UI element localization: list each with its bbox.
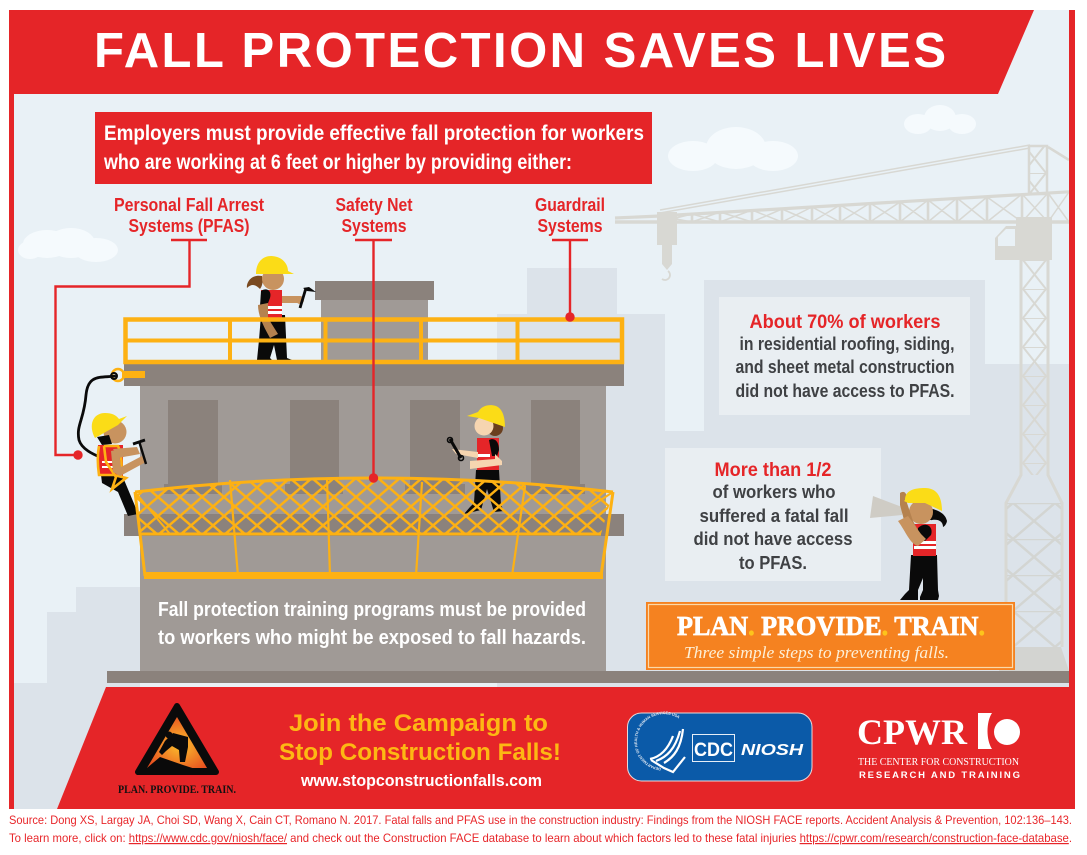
label: personal fall arrest systems xyxy=(114,194,264,236)
employer requirement box: Employers must provide effective fall protection for workers xyxy=(104,122,644,145)
label: personal fall arrest systems: Personal Fall Arrest xyxy=(114,194,264,215)
background city skyline xyxy=(14,268,1070,809)
plan provide train banner: PLAN. PROVIDE. TRAIN. xyxy=(677,611,985,641)
worker on ledge with wrench xyxy=(448,405,505,514)
employer requirement box xyxy=(95,112,652,184)
campaign call to action: Stop Construction Falls! xyxy=(279,739,561,766)
label: guardrail systems: Guardrail xyxy=(535,194,605,215)
source citation and links: To learn more, click on: https://www.cdc.gov/niosh/face/ and check out the Construction FACE database to learn about which factors led to these fatal injuries https://cpwr.com/research/construction-face-database. xyxy=(9,831,1072,845)
campaign sign logo: PLAN. PROVIDE. TRAIN. xyxy=(118,784,236,796)
callout: more than half: to PFAS. xyxy=(739,553,807,573)
label: guardrail systems: Systems xyxy=(538,215,602,236)
callout: 70 percent: in residential roofing, siding, xyxy=(740,334,954,354)
CDC NIOSH logo panel: NIOSH xyxy=(741,742,804,759)
callout: more than half: did not have access xyxy=(694,529,852,549)
worker on roof with hammer xyxy=(247,256,316,360)
CPWR logo: THE CENTER FOR CONSTRUCTION xyxy=(858,757,1019,768)
ground strip xyxy=(107,671,1069,683)
pointer line: guardrail xyxy=(552,240,588,322)
label: personal fall arrest systems: Systems (PFAS) xyxy=(128,215,250,236)
callout: more than half: of workers who xyxy=(712,482,836,502)
callout: more than half xyxy=(665,448,881,581)
safety net xyxy=(130,475,620,579)
worker in fall arrest harness xyxy=(92,413,146,516)
callout: 70 percent xyxy=(719,297,970,415)
label: safety net systems: Safety Net xyxy=(336,194,412,215)
frame right edge xyxy=(1069,10,1075,809)
employer requirement box: who are working at 6 feet or higher by providing either: xyxy=(103,151,572,174)
training text xyxy=(158,599,586,649)
pointer line: safety net xyxy=(355,240,392,483)
campaign call to action: Join the Campaign to xyxy=(289,710,548,737)
CDC NIOSH logo panel: DEPARTMENT OF HEALTH & HUMAN SERVICES USA xyxy=(634,712,680,770)
bottom red band xyxy=(57,687,1075,809)
plan provide train banner: Three simple steps to preventing falls. xyxy=(684,643,949,662)
CPWR logo: CPWR xyxy=(857,712,968,752)
CDC NIOSH logo panel: CDC xyxy=(694,740,733,761)
campaign call to action: www.stopconstructionfalls.com xyxy=(300,772,542,790)
label: safety net systems xyxy=(336,194,412,236)
callout: 70 percent: did not have access to PFAS. xyxy=(736,381,954,401)
callout: more than half: suffered a fatal fall xyxy=(700,506,848,526)
campaign sign logo xyxy=(118,706,236,796)
CPWR logo xyxy=(857,712,1020,781)
label: guardrail systems xyxy=(535,194,605,236)
title: FALL PROTECTION SAVES LIVES xyxy=(94,24,946,78)
pointer line: personal fall arrest xyxy=(56,240,207,460)
crane cabin and trolley hook xyxy=(657,212,1069,671)
tower crane xyxy=(615,145,1069,647)
callout: more than half: More than 1/2 xyxy=(714,459,832,481)
training text: to workers who might be exposed to fall hazards. xyxy=(158,627,586,649)
label: safety net systems: Systems xyxy=(342,215,406,236)
CPWR logo: RESEARCH AND TRAINING xyxy=(859,770,1020,781)
callout: 70 percent: and sheet metal construction xyxy=(736,357,954,377)
source citation and links xyxy=(9,813,1072,845)
plan provide train banner xyxy=(646,602,1015,670)
training text: Fall protection training programs must be provided xyxy=(158,599,586,621)
callout: 70 percent: About 70% of workers xyxy=(750,311,941,333)
worker with megaphone xyxy=(870,488,947,600)
CDC NIOSH logo panel xyxy=(627,712,812,782)
building xyxy=(124,281,624,671)
campaign call to action xyxy=(279,710,561,790)
guardrail xyxy=(124,319,623,362)
anchor point and lanyard xyxy=(78,369,145,458)
clouds xyxy=(18,105,976,262)
